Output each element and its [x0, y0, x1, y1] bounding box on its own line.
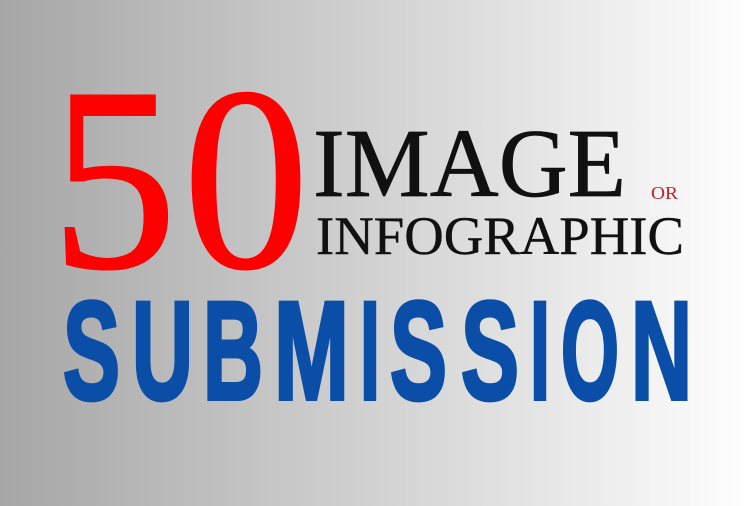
heading: SUBMISSION: B — [203, 272, 263, 429]
number 50: 0 — [183, 34, 309, 324]
heading: SUBMISSION: I — [360, 272, 380, 429]
heading: SUBMISSION — [63, 272, 692, 429]
number 50: 5 — [51, 34, 177, 324]
number 50 — [51, 34, 309, 324]
heading: SUBMISSION: N — [631, 272, 692, 429]
heading: SUBMISSION: S — [390, 272, 447, 429]
heading: INFOGRAPHIC: INFOGRAPHIC — [316, 206, 684, 266]
heading: SUBMISSION: O — [561, 272, 619, 429]
heading: SUBMISSION: U — [132, 272, 193, 429]
heading: SUBMISSION: I — [530, 272, 550, 429]
heading: SUBMISSION: S — [63, 272, 120, 429]
heading: SUBMISSION: M — [274, 272, 349, 429]
heading: IMAGE: IMAGE — [313, 110, 626, 217]
heading: SUBMISSION: S — [461, 272, 519, 429]
label: OR: OR — [651, 183, 678, 203]
